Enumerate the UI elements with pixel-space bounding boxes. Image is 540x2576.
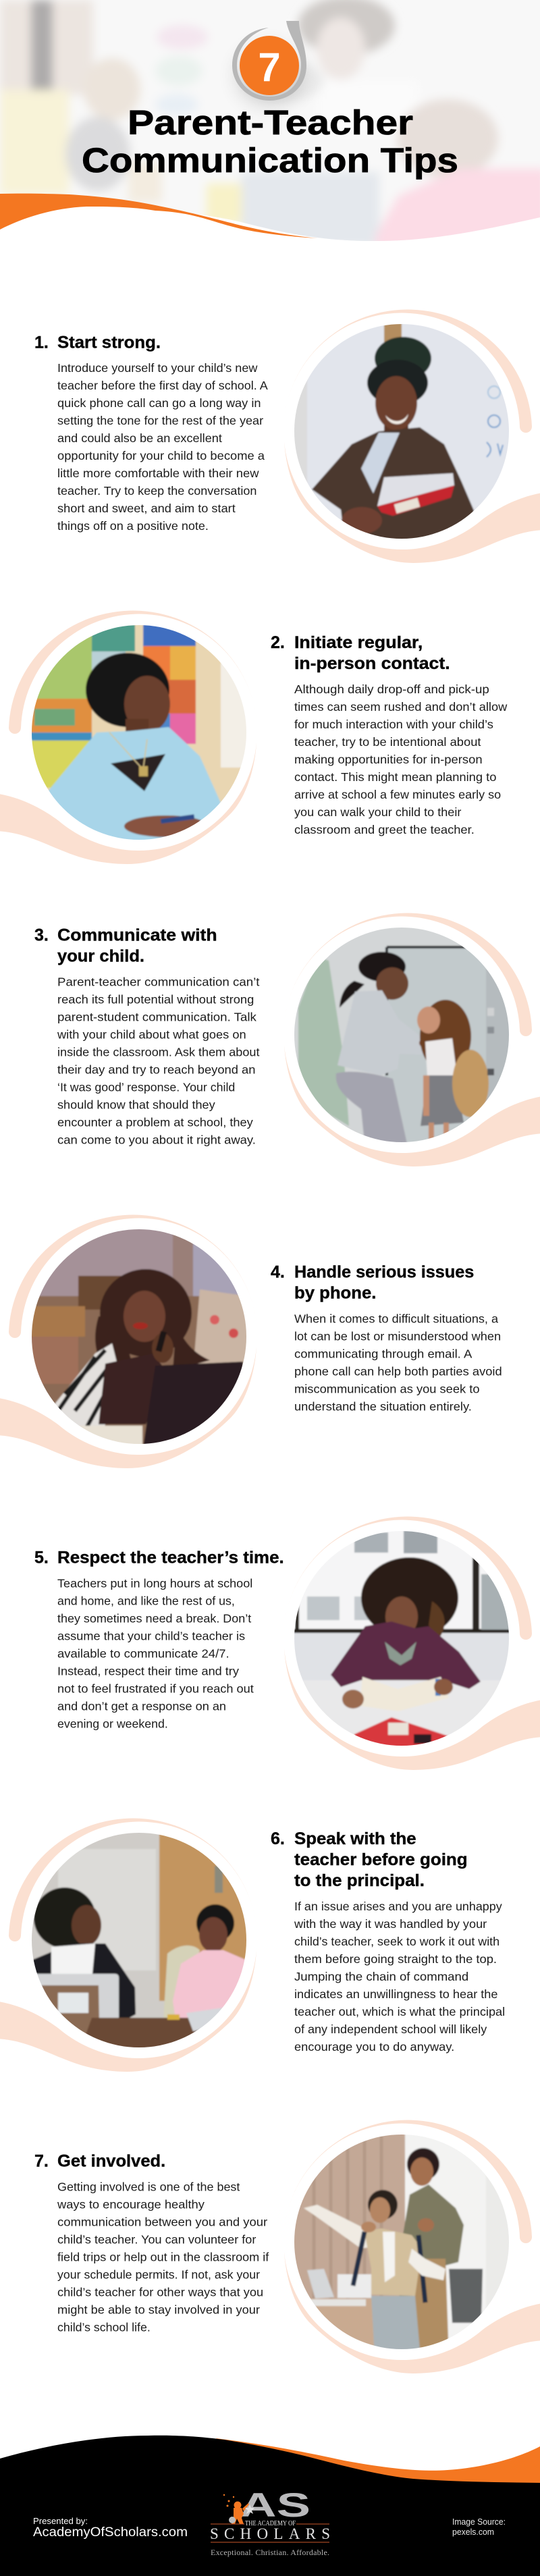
presented by credit: [33, 2516, 188, 2540]
tip 6 body text: of any independent school will likely: [294, 2022, 487, 2036]
tip 7 swoosh frame: [284, 2120, 540, 2373]
tip 3 heading: your child.: [57, 946, 144, 965]
footer panel: [0, 2436, 540, 2576]
tip 5 photo: woman reading at table: [294, 1531, 509, 1746]
tip 2 heading: [271, 633, 450, 673]
footer black background: [0, 2436, 540, 2576]
tip 7 body text: might be able to stay involved in your: [57, 2303, 260, 2317]
presented by credit: Presented by:: [33, 2516, 88, 2526]
tip 6 body text: If an issue arises and you are unhappy: [294, 1900, 502, 1913]
tip 2 heading: Initiate regular,: [294, 633, 423, 652]
tip 1 panel: [34, 310, 540, 563]
tip 3 body text: reach its full potential without strong: [57, 992, 254, 1006]
tip 4 heading: [271, 1262, 474, 1303]
tip 7 body text: child’s teacher for other ways that you: [57, 2286, 263, 2299]
tip 3 heading: [34, 926, 217, 965]
tip 7 body text: child’s teacher. You can volunteer for: [57, 2233, 256, 2247]
tip 7 photo: mother adjusting girl's backpack: [294, 2135, 509, 2349]
tip 3 body text: [57, 975, 260, 1146]
tip 6 body text: child’s teacher, seek to work it out with: [294, 1935, 500, 1948]
tip 3 body text: their day and try to reach beyond an: [57, 1063, 255, 1076]
logo wordmark: [210, 2520, 330, 2557]
tip 4 body text: lot can be lost or misunderstood when: [294, 1330, 501, 1343]
tip 6 body text: with the way it was handled by your: [294, 1917, 487, 1931]
tip 6 body text: Jumping the chain of command: [294, 1970, 468, 1983]
tip 1 body text: opportunity for your child to become a: [57, 449, 265, 462]
logo wordmark: SCHOLARS: [210, 2525, 330, 2542]
tip 6 body text: indicates an unwillingness to hear the: [294, 1987, 498, 2001]
tip 4 heading: 4.: [271, 1262, 285, 1281]
tip 3 heading: 3.: [34, 926, 49, 945]
tip 2 body text: arrive at school a few minutes early so: [294, 788, 501, 801]
tip 6 swoosh frame: [0, 1819, 256, 2072]
tip 5 body text: Instead, respect their time and try: [57, 1665, 239, 1678]
tip 4 photo: woman on phone at laptop: [32, 1229, 246, 1444]
tip 1 body text: setting the tone for the rest of the year: [57, 414, 263, 427]
logo letters AS: AS: [240, 2486, 310, 2524]
tip 7 body text: [57, 2180, 269, 2334]
tip 1 body text: Introduce yourself to your child’s new: [57, 361, 258, 375]
tip 7 body text: Getting involved is one of the best: [57, 2180, 240, 2194]
tip 6 heading: Speak with the: [294, 1829, 416, 1848]
tip 1 body text: teacher. Try to keep the conversation: [57, 484, 256, 498]
tip 7 body text: your schedule permits. If not, ask your: [57, 2268, 260, 2282]
tip 5 body text: and home, and like the rest of us,: [57, 1594, 235, 1608]
tip 3 heading: Communicate with: [57, 926, 217, 945]
title: [82, 103, 458, 180]
tip 3 body text: encounter a problem at school, they: [57, 1115, 253, 1129]
tip 7 body text: ways to encourage healthy: [57, 2198, 205, 2211]
tip 5 body text: and don’t get a response on an: [57, 1700, 226, 1713]
tip 1 swoosh frame: [284, 310, 540, 563]
orange header wave: [0, 194, 317, 238]
tip 5 heading: Respect the teacher’s time.: [57, 1549, 284, 1567]
tip 5 body text: Teachers put in long hours at school: [57, 1577, 252, 1590]
tip 5 body text: assume that your child’s teacher is: [57, 1630, 245, 1643]
tip 4 swoosh frame: [0, 1215, 256, 1468]
image source credit: pexels.com: [452, 2527, 494, 2537]
tip 3 swoosh frame: [284, 913, 540, 1166]
tip 7 body text: communication between you and your: [57, 2216, 267, 2229]
tip 7 heading: Get involved.: [57, 2152, 165, 2171]
tip 3 body text: ‘It was good’ response. Your child: [57, 1080, 235, 1094]
tip 2 photo: teacher in blue sweater: [32, 625, 246, 840]
tip 2 panel: [0, 611, 508, 864]
tip 2 body text: times can seem rushed and don’t allow: [294, 700, 508, 714]
tip 6 body text: [294, 1900, 505, 2054]
tip 5 heading: 5.: [34, 1549, 49, 1567]
tip 3 photo: mother greeting child: [294, 928, 509, 1142]
tip 5 body text: available to communicate 24/7.: [57, 1647, 230, 1661]
image source credit: [452, 2517, 506, 2537]
tip 4 body text: communicating through email. A: [294, 1347, 473, 1361]
presented by credit: AcademyOfScholars.com: [33, 2525, 188, 2540]
tip 5 body text: not to feel frustrated if you reach out: [57, 1682, 254, 1696]
image source credit: Image Source:: [452, 2517, 506, 2527]
tip 3 body text: can come to you about it right away.: [57, 1133, 256, 1146]
logo wordmark: THE ACADEMY OF: [245, 2520, 296, 2527]
tip 3 body text: with your child about what goes on: [57, 1027, 246, 1041]
number badge: [232, 21, 306, 107]
tip 4 body text: phone call can help both parties avoid: [294, 1365, 502, 1378]
tip 2 swoosh frame: [0, 611, 256, 864]
tip 2 body text: for much interaction with your child’s: [294, 718, 493, 731]
tip 1 body text: quick phone call can go a long way in: [57, 396, 261, 410]
tip 5 swoosh frame: [284, 1517, 540, 1770]
logo icon: astronaut and stars: [223, 2494, 249, 2524]
tip 4 body text: miscommunication as you seek to: [294, 1383, 479, 1396]
tip 7 panel: [34, 2120, 540, 2373]
tip 6 panel: [0, 1819, 505, 2072]
tip 4 body text: understand the situation entirely.: [294, 1400, 472, 1414]
tip 4 heading: Handle serious issues: [294, 1262, 474, 1281]
header panel: [0, 0, 540, 250]
footer orange wave: [216, 2438, 540, 2484]
tip 6 body text: them before going straight to the top.: [294, 1952, 497, 1966]
tip 2 body text: making opportunities for in-person: [294, 753, 483, 766]
tip 2 body text: classroom and greet the teacher.: [294, 823, 475, 836]
tip 5 body text: [57, 1577, 254, 1731]
tip 5 body text: they sometimes need a break. Don’t: [57, 1612, 251, 1626]
tip 3 panel: [34, 913, 540, 1166]
title: Communication Tips: [82, 141, 458, 180]
tip 1 body text: little more comfortable with their new: [57, 466, 259, 480]
tip 6 photo: two women in meeting: [32, 1833, 246, 2047]
number badge: 7: [258, 45, 281, 90]
tip 1 heading: Start strong.: [57, 333, 161, 352]
tip 2 heading: 2.: [271, 633, 285, 652]
tip 6 heading: to the principal.: [294, 1871, 425, 1890]
tip 6 heading: teacher before going: [294, 1850, 468, 1869]
tip 6 body text: teacher out, which is what the principal: [294, 2005, 505, 2018]
title: Parent-Teacher: [128, 103, 413, 142]
tip 1 photo: teacher holding book: [294, 324, 509, 539]
tip 4 panel: [0, 1215, 502, 1468]
tip 1 heading: 1.: [34, 333, 49, 352]
tip 2 body text: Although daily drop-off and pick-up: [294, 682, 489, 696]
tip 3 body text: should know that should they: [57, 1098, 215, 1111]
tip 6 heading: [271, 1829, 468, 1890]
tip 6 body text: encourage you to do anyway.: [294, 2040, 454, 2054]
tip 3 body text: Parent-teacher communication can’t: [57, 975, 260, 988]
tip 1 body text: teacher before the first day of school. A: [57, 379, 268, 392]
tip 1 body text: things off on a positive note.: [57, 519, 209, 533]
tip 5 body text: evening or weekend.: [57, 1717, 168, 1731]
tip 2 body text: you can walk your child to their: [294, 805, 462, 819]
tip 5 panel: [34, 1517, 540, 1770]
tip 3 body text: parent-student communication. Talk: [57, 1010, 256, 1023]
header faded photo background: [0, 0, 540, 250]
tip 1 body text: and could also be an excellent: [57, 431, 222, 445]
tip 7 body text: field trips or help out in the classroom if: [57, 2251, 269, 2264]
logo wordmark: Exceptional. Christian. Affordable.: [211, 2548, 329, 2557]
tip 6 heading: 6.: [271, 1829, 285, 1848]
school logo: [210, 2486, 330, 2557]
tip 4 heading: by phone.: [294, 1284, 376, 1303]
tip 7 body text: child’s school life.: [57, 2321, 151, 2334]
tip 2 body text: teacher, try to be intentional about: [294, 735, 481, 749]
tip 4 body text: [294, 1312, 502, 1414]
logo icon: star: [245, 2504, 254, 2514]
tip 1 body text: [57, 361, 268, 533]
tip 4 body text: When it comes to difficult situations, a: [294, 1312, 498, 1326]
tip 3 body text: inside the classroom. Ask them about: [57, 1045, 260, 1058]
tip 2 body text: [294, 682, 508, 836]
tip 7 heading: 7.: [34, 2152, 49, 2171]
tip 1 body text: short and sweet, and aim to start: [57, 502, 236, 515]
tip 2 heading: in-person contact.: [294, 654, 450, 673]
tip 2 body text: contact. This might mean planning to: [294, 770, 497, 784]
